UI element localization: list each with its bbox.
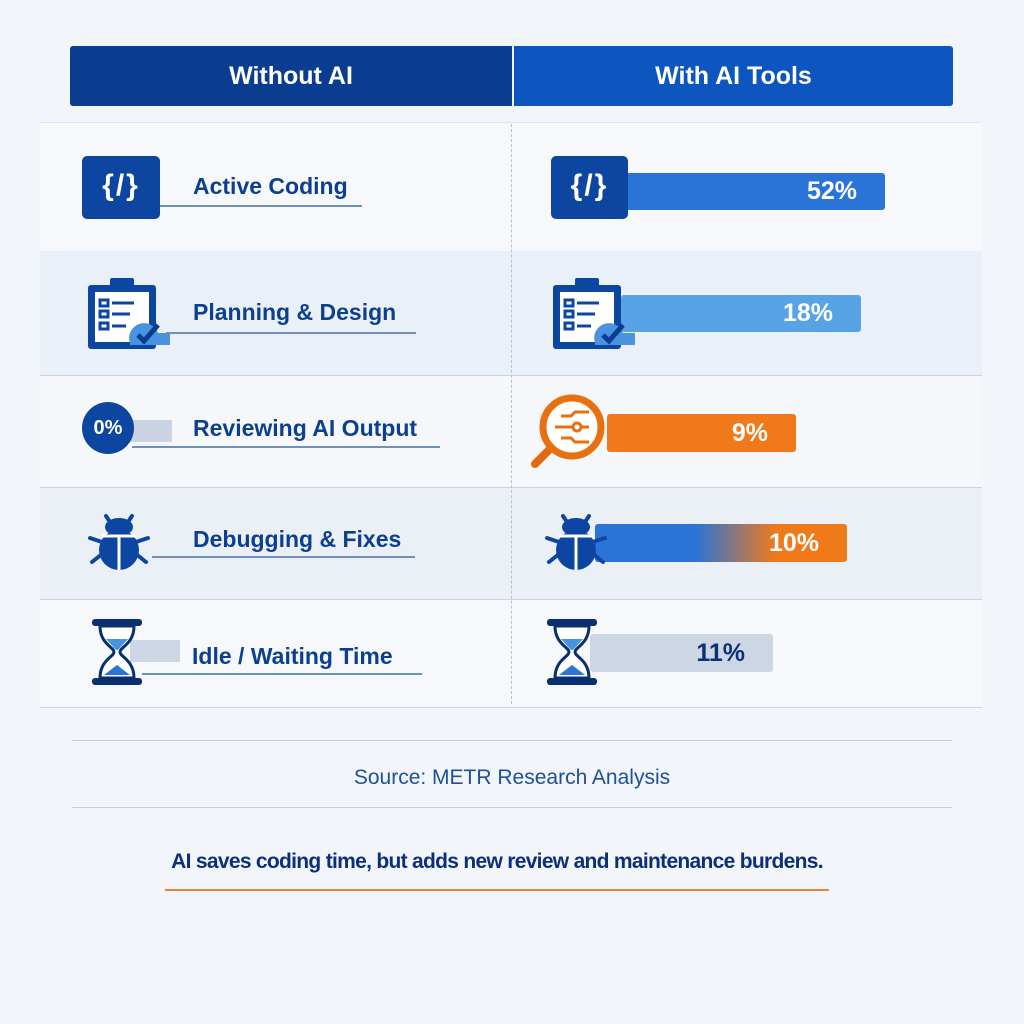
header: [70, 46, 953, 106]
row: active coding (without): [82, 156, 362, 219]
icon: bug: [88, 514, 150, 570]
icon: clipboard: [553, 278, 635, 349]
icon: code: [551, 156, 628, 219]
row: idle (without): Idle / Waiting Time: [192, 643, 393, 669]
icon: hourglass: [547, 619, 597, 685]
header: with AI tools: With AI Tools: [655, 62, 812, 90]
icon: clipboard: [88, 278, 170, 349]
row: planning (without): [88, 278, 416, 349]
header: without AI: [70, 46, 512, 106]
icon: code: {/}: [571, 169, 608, 202]
row: planning (with): [553, 278, 861, 349]
source text: Source: METR Research Analysis: [354, 766, 670, 789]
icon: code: {/}: [102, 169, 140, 202]
row: reviewing (without): Reviewing AI Output: [193, 415, 417, 441]
row: idle (without): [92, 619, 422, 685]
header: without AI: Without AI: [229, 62, 353, 90]
icon: hourglass: [92, 619, 142, 685]
row: idle (with): [547, 619, 773, 685]
icon: bug: [544, 514, 607, 570]
row: debugging (with): [544, 514, 847, 570]
icon: magnifier: [531, 394, 604, 468]
row: planning (with): 18%: [783, 299, 833, 327]
row: debugging (without): Debugging & Fixes: [193, 526, 401, 552]
takeaway text: AI saves coding time, but adds new review and maintenance burdens.: [171, 850, 823, 873]
icon: 0% circle: 0%: [94, 417, 122, 439]
icon: code: [82, 156, 160, 219]
row: active coding (with): 52%: [807, 177, 857, 205]
row: reviewing (with): 9%: [732, 419, 768, 447]
row: debugging (without): [88, 514, 415, 570]
row: debugging (with): 10%: [769, 529, 819, 557]
row: active coding (without): Active Coding: [193, 173, 348, 199]
header: with AI tools: [514, 46, 953, 106]
row: idle (with): 11%: [696, 639, 745, 667]
icon: 0% circle: [82, 402, 134, 454]
row: reviewing (with): [531, 394, 796, 468]
row: active coding (with): [551, 156, 885, 219]
row: reviewing (without): [82, 402, 440, 454]
row: planning (without): Planning & Design: [193, 299, 396, 325]
